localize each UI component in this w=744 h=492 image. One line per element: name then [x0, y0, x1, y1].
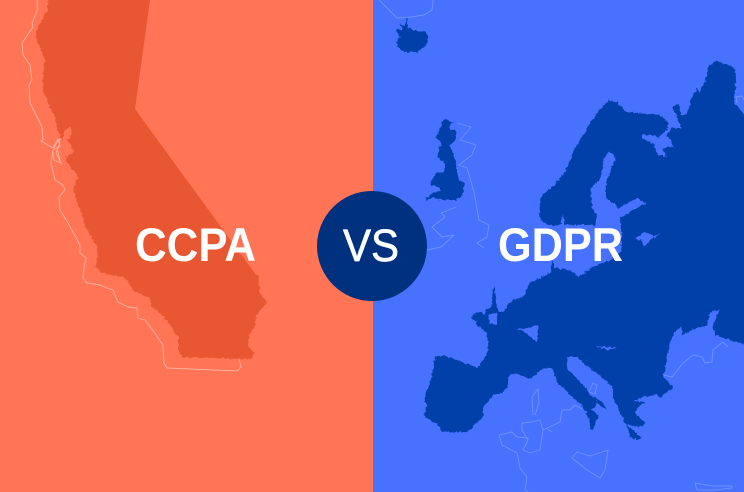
- map: California outline offset: [22, 0, 241, 371]
- map: California silhouette: [36, 0, 267, 359]
- panel: GDPR blue side: [373, 0, 744, 492]
- panel: CCPA orange side: [0, 0, 373, 492]
- label: VS: VS: [343, 220, 399, 271]
- map: continental Europe: [423, 61, 744, 440]
- badge: VS circle: [317, 191, 427, 301]
- heading: GDPR: GDPR: [498, 218, 623, 271]
- map: Great Britain: [425, 119, 465, 201]
- map: sea border outlines: [379, 0, 744, 492]
- map: Iceland: [396, 18, 428, 52]
- heading: CCPA: CCPA: [135, 218, 256, 271]
